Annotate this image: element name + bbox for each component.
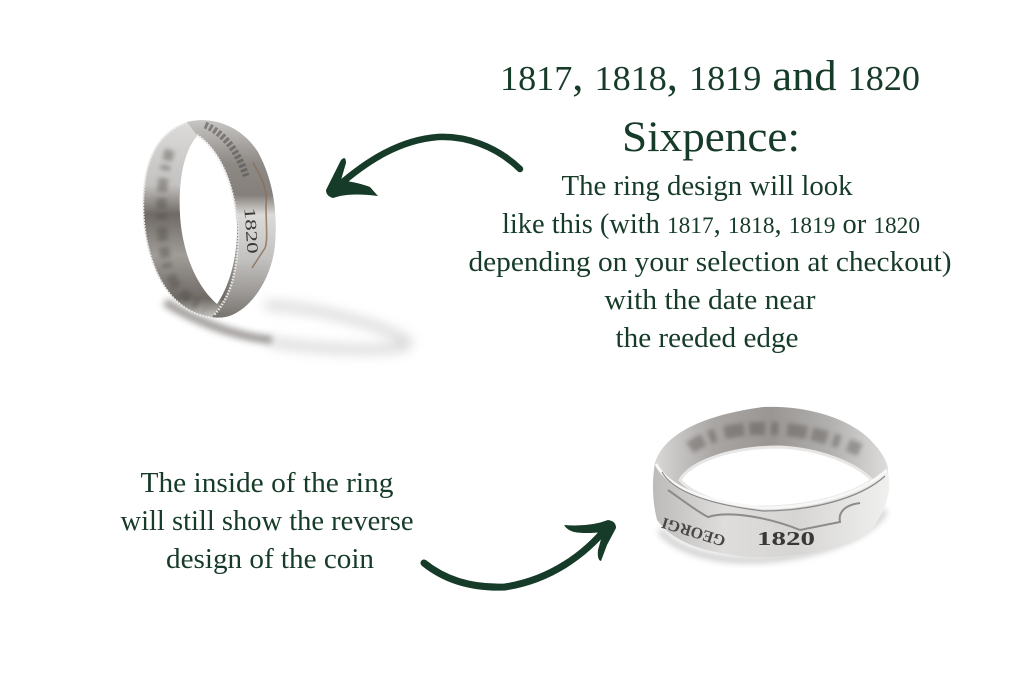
text block: inside of the ring: design of the coin <box>166 544 374 575</box>
text block: inside of the ring: The inside of the ring <box>140 468 394 499</box>
ring outer rim <box>143 123 217 318</box>
ring outer band <box>187 120 276 318</box>
text block: ring design description: depending on your selection at checkout) <box>468 247 952 278</box>
ring engraved legend <box>205 125 246 176</box>
text block: ring design description <box>468 171 952 354</box>
ring date: 1820 <box>240 207 261 254</box>
arrow: pointing to upper ring <box>326 137 520 198</box>
heading <box>500 53 920 161</box>
ring coin relief <box>668 490 860 530</box>
ring shadow <box>660 510 885 560</box>
ring milled edge <box>197 135 238 315</box>
heading: Sixpence: <box>622 114 800 161</box>
ring legend: GEORGI <box>660 514 728 549</box>
ring inner wall <box>655 407 888 500</box>
text block: ring design description: The ring design will look <box>562 171 852 202</box>
arrow: pointing to lower ring <box>424 520 616 587</box>
ring wall engraving <box>161 150 205 310</box>
ring photo: inside view <box>653 407 889 560</box>
ring date: 1820 <box>757 528 815 550</box>
ring photo: outer face with date <box>143 120 408 350</box>
ring outer band <box>653 463 889 557</box>
ring inner wall <box>143 122 240 318</box>
text block: ring design description: the reeded edge <box>616 323 798 354</box>
ring shadow <box>165 302 408 350</box>
text block: ring design description: with the date near <box>604 285 816 316</box>
ring rim highlight <box>656 464 887 508</box>
text block: ring design description: like this (with 1817, 1818, 1819 or 1820 <box>502 209 920 240</box>
heading: 1817, 1818, 1819 and 1820 <box>500 53 920 100</box>
ring hole <box>680 447 872 507</box>
ring wall engraving <box>690 428 860 450</box>
text block: inside of the ring <box>120 468 414 575</box>
ring coin relief <box>252 163 267 268</box>
ring hole <box>180 135 237 304</box>
text block: inside of the ring: will still show the reverse <box>120 506 414 537</box>
